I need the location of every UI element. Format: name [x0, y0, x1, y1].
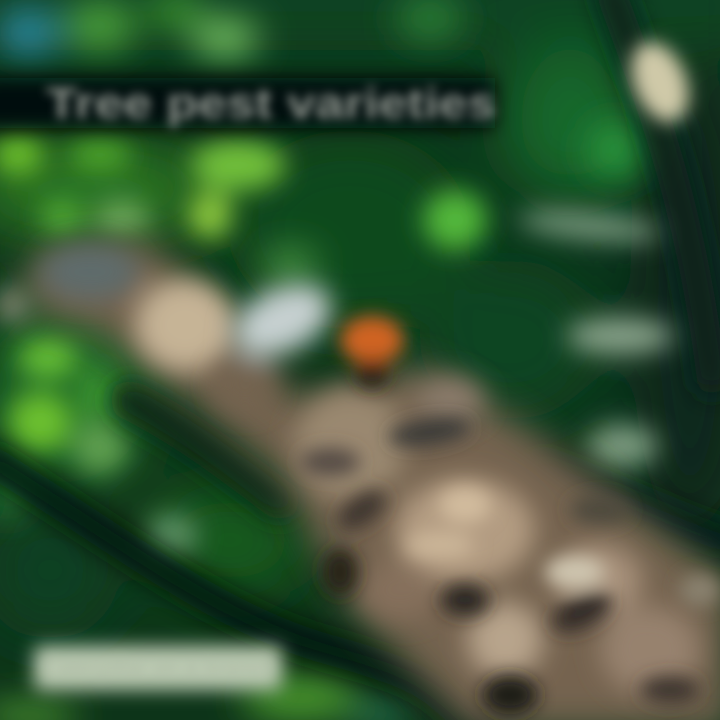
right side pale foliage streaks	[517, 206, 674, 468]
orange head	[340, 316, 404, 389]
title: Tree pest varieties	[46, 79, 496, 128]
pale seed pod top right	[620, 33, 700, 131]
caption	[34, 646, 282, 690]
caterpillar on branch	[0, 240, 720, 720]
caption: Caterpillar on a branch	[42, 654, 274, 681]
bright leaves left	[8, 338, 198, 557]
bright leaves upper left	[0, 135, 487, 250]
